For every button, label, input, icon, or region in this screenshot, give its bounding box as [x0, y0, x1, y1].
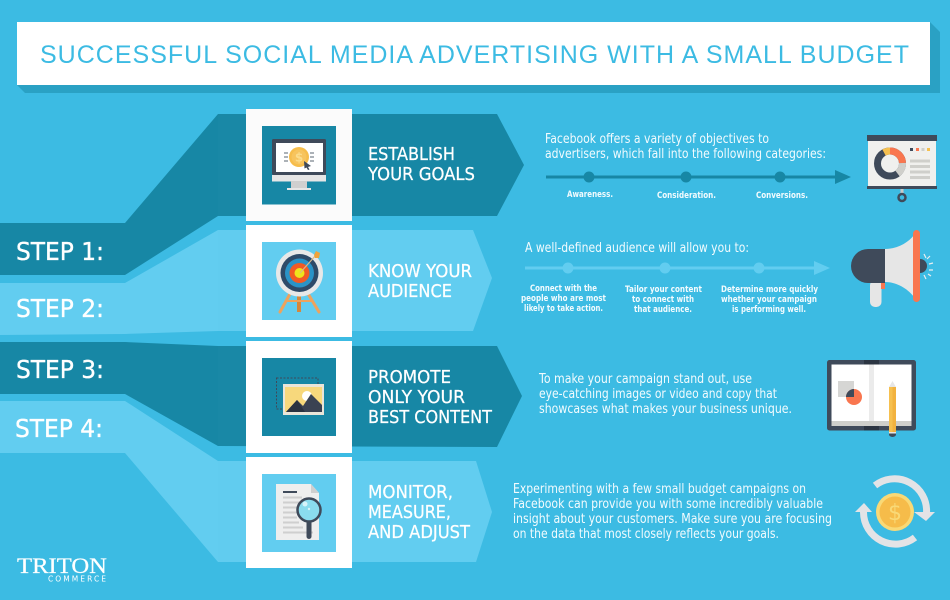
- step headings: KNOW YOUR: [368, 261, 472, 282]
- step 1 timeline: Consideration.: [657, 191, 716, 201]
- step 4 description: Facebook can provide you with some incredibly valuable: [513, 497, 823, 512]
- icon: open book with pencil: [827, 360, 916, 437]
- step 2 ribbon: STEP 2:: [16, 294, 104, 323]
- step 3 ribbon: STEP 3:: [16, 355, 104, 384]
- step 1 description: [545, 132, 826, 162]
- icon card: document with magnifier: [246, 457, 352, 568]
- step headings: AUDIENCE: [368, 281, 452, 302]
- step 3 description: showcases what makes your business unique.: [539, 402, 792, 417]
- step 2 timeline: is performing well.: [732, 305, 806, 315]
- step 3 description: [538, 372, 792, 417]
- icon card: monitor with coin: [246, 109, 352, 221]
- icon: presentation board: [867, 135, 937, 201]
- step 4 description: [513, 482, 832, 542]
- step 2 timeline: likely to take action.: [524, 304, 603, 314]
- step 2 description: A well-defined audience will allow you to:: [525, 241, 749, 256]
- step headings: BEST CONTENT: [368, 407, 492, 428]
- step 1 timeline: [546, 170, 851, 201]
- step 2 timeline: Determine more quickly: [721, 285, 818, 295]
- step 1 description: advertisers, which fall into the following categories:: [545, 147, 826, 162]
- step 4 ribbon: [0, 401, 492, 562]
- step 2 timeline: Connect with the: [530, 284, 597, 294]
- step 4 description: on the data that most closely reflects your goals.: [513, 527, 779, 542]
- step headings: ONLY YOUR: [368, 387, 465, 408]
- icon: coin with cycle arrows: $: [888, 501, 902, 526]
- step 3 ribbon: [0, 342, 522, 447]
- step 4 ribbon: STEP 4:: [15, 414, 103, 443]
- logo: COMMERCE: [48, 574, 106, 584]
- step headings: YOUR GOALS: [367, 164, 475, 185]
- step 1 timeline: Conversions.: [756, 191, 808, 201]
- step 1 timeline: Awareness.: [567, 190, 613, 200]
- step 4 description: insight about your customers. Make sure you are focusing: [513, 512, 832, 527]
- step headings: PROMOTE: [368, 367, 451, 388]
- icon: coin with cycle arrows: [855, 479, 935, 544]
- step 2 timeline: whether your campaign: [721, 295, 817, 305]
- step 3 description: eye-catching images or video and copy that: [539, 387, 777, 402]
- icon card: archery target: [246, 225, 352, 337]
- step headings: MONITOR,: [368, 482, 453, 503]
- step headings: ESTABLISH: [368, 144, 455, 165]
- logo: TRITON: [17, 553, 107, 578]
- step 2 timeline: to connect with: [632, 295, 694, 305]
- title banner: [17, 22, 940, 93]
- icon: megaphone: [851, 230, 933, 307]
- step headings: MEASURE,: [368, 502, 451, 523]
- icon card: monitor with coin: $: [295, 150, 303, 164]
- step 1 description: Facebook offers a variety of objectives to: [545, 132, 769, 147]
- step headings: AND ADJUST: [368, 522, 470, 543]
- step 2 timeline: [521, 261, 830, 315]
- step 1 ribbon: [0, 114, 524, 275]
- icon card: image frame: [246, 341, 352, 453]
- step 2 timeline: people who are most: [521, 294, 606, 304]
- step 1 ribbon: STEP 1:: [16, 237, 104, 266]
- step 2 ribbon: [0, 230, 492, 335]
- step 4 description: Experimenting with a few small budget campaigns on: [513, 482, 806, 497]
- step headings: [367, 144, 492, 543]
- step 2 timeline: Tailor your content: [625, 285, 702, 295]
- step 2 timeline: that audience.: [634, 305, 692, 315]
- step 3 description: To make your campaign stand out, use: [538, 372, 752, 387]
- title banner: SUCCESSFUL SOCIAL MEDIA ADVERTISING WITH A SMALL BUDGET: [40, 41, 909, 69]
